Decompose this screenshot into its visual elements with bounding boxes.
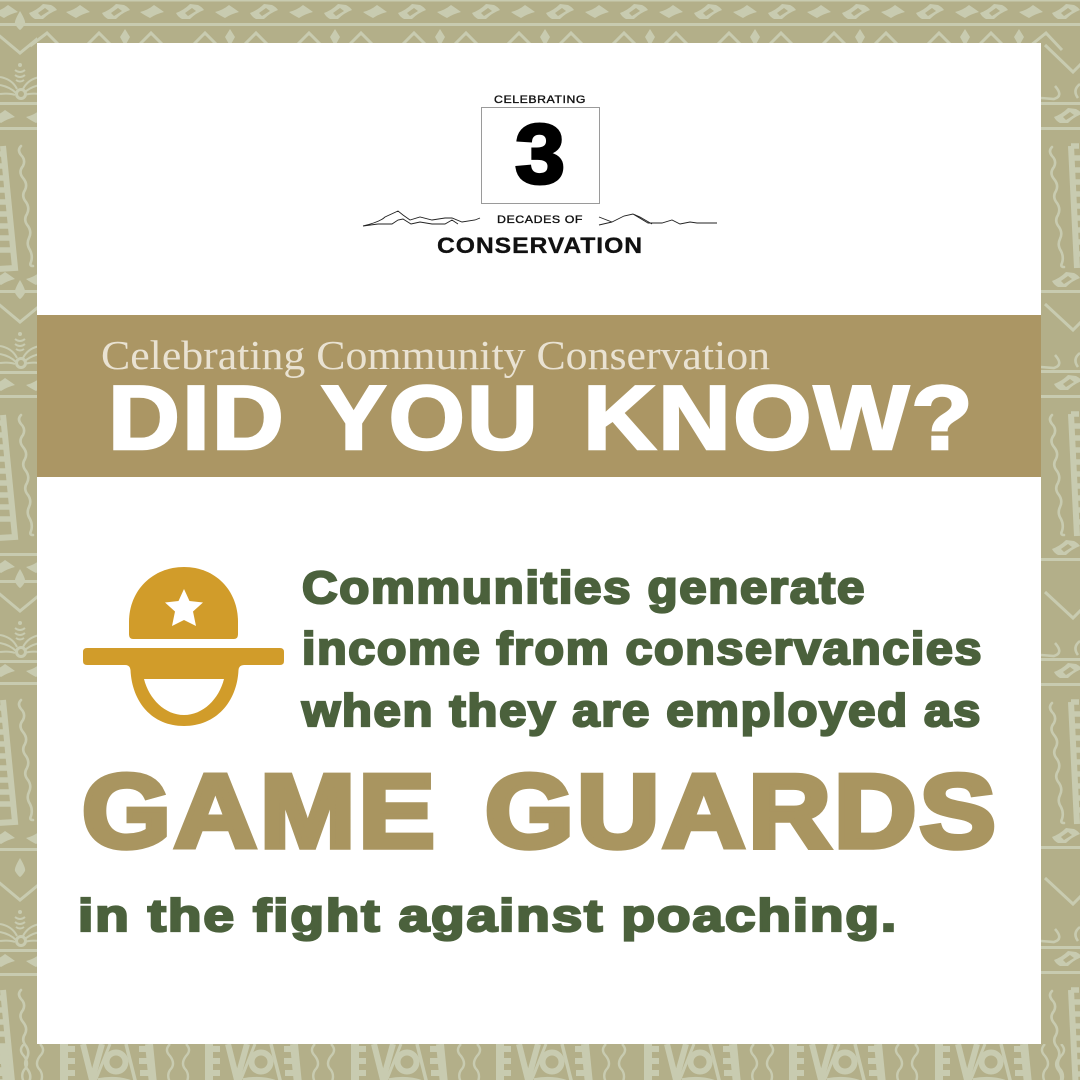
line 3: when they are employed as <box>301 685 982 736</box>
heading word: did: DID <box>108 368 286 469</box>
heading word: know: KNOW? <box>583 368 975 469</box>
icon: mountain line left <box>363 211 480 226</box>
left column pattern <box>0 11 37 1080</box>
right column pattern <box>1041 45 1080 1080</box>
logo numeral: 3 <box>515 107 565 201</box>
heading word: you: YOU <box>321 368 540 469</box>
logo: 3 decades of conservation <box>363 94 717 258</box>
logo box <box>482 108 600 204</box>
line 1: Communities generate <box>302 562 866 613</box>
banner heading <box>108 368 975 469</box>
word: guards: GUARDS <box>485 754 999 870</box>
highlight: game guards <box>82 754 999 870</box>
logo label: decades of: DECADES OF <box>497 214 583 226</box>
logo label: conservation: CONSERVATION <box>437 233 643 258</box>
bottom band pattern <box>0 1044 1064 1080</box>
body text <box>301 562 983 736</box>
word: game: GAME <box>82 754 438 870</box>
logo label: celebrating: CELEBRATING <box>494 94 586 106</box>
banner <box>37 315 1041 477</box>
closing text: in the fight against poaching. <box>78 890 898 941</box>
banner subtitle: Celebrating Community Conservation <box>101 332 770 378</box>
icon: ranger hat with star <box>83 567 284 726</box>
icon: mountain line right <box>599 214 717 225</box>
line 2: income from conservancies <box>302 623 983 674</box>
